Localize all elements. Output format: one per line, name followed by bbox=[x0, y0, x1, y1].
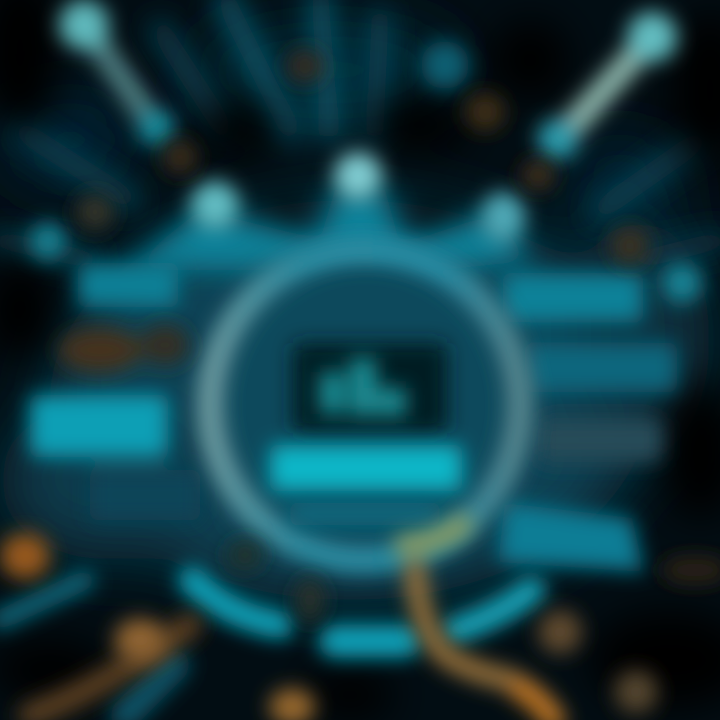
chart icon bbox=[320, 358, 406, 416]
arc: left bbox=[192, 580, 280, 625]
bar: left lower bbox=[90, 470, 200, 520]
node: far left bbox=[29, 222, 67, 260]
node: far right bbox=[662, 263, 702, 303]
screen bbox=[293, 343, 447, 433]
ring stroke bbox=[210, 250, 520, 560]
line: bottom teal bbox=[125, 665, 175, 715]
stick: top left bbox=[59, 0, 175, 146]
lower bar bbox=[290, 503, 440, 525]
bar: right 1 bbox=[503, 273, 643, 322]
arc: centre bbox=[335, 624, 405, 658]
node: right bbox=[481, 192, 525, 242]
bar: right 3 bbox=[538, 418, 662, 462]
arc: right bbox=[455, 590, 532, 630]
side bars bbox=[30, 263, 677, 572]
stick: top right bbox=[537, 12, 677, 160]
radiating lines bbox=[0, 0, 720, 260]
background glow bbox=[0, 20, 710, 600]
fan shape above ring bbox=[125, 190, 535, 270]
node: centre bbox=[334, 152, 382, 200]
ring fill bbox=[215, 255, 515, 555]
line: bottom left bbox=[0, 580, 85, 620]
bar: right 4 bbox=[498, 503, 644, 572]
highlight bar bbox=[270, 445, 462, 491]
top node icons bbox=[29, 0, 702, 303]
bar: left upper bbox=[78, 263, 178, 307]
node: left bbox=[191, 181, 239, 229]
node: upper bbox=[421, 41, 469, 89]
magnifier ring bbox=[210, 250, 520, 560]
bar: right 2 bbox=[525, 343, 677, 392]
orange connector bbox=[30, 525, 555, 720]
bottom arcs bbox=[0, 580, 532, 715]
bar: left middle bbox=[30, 395, 168, 457]
